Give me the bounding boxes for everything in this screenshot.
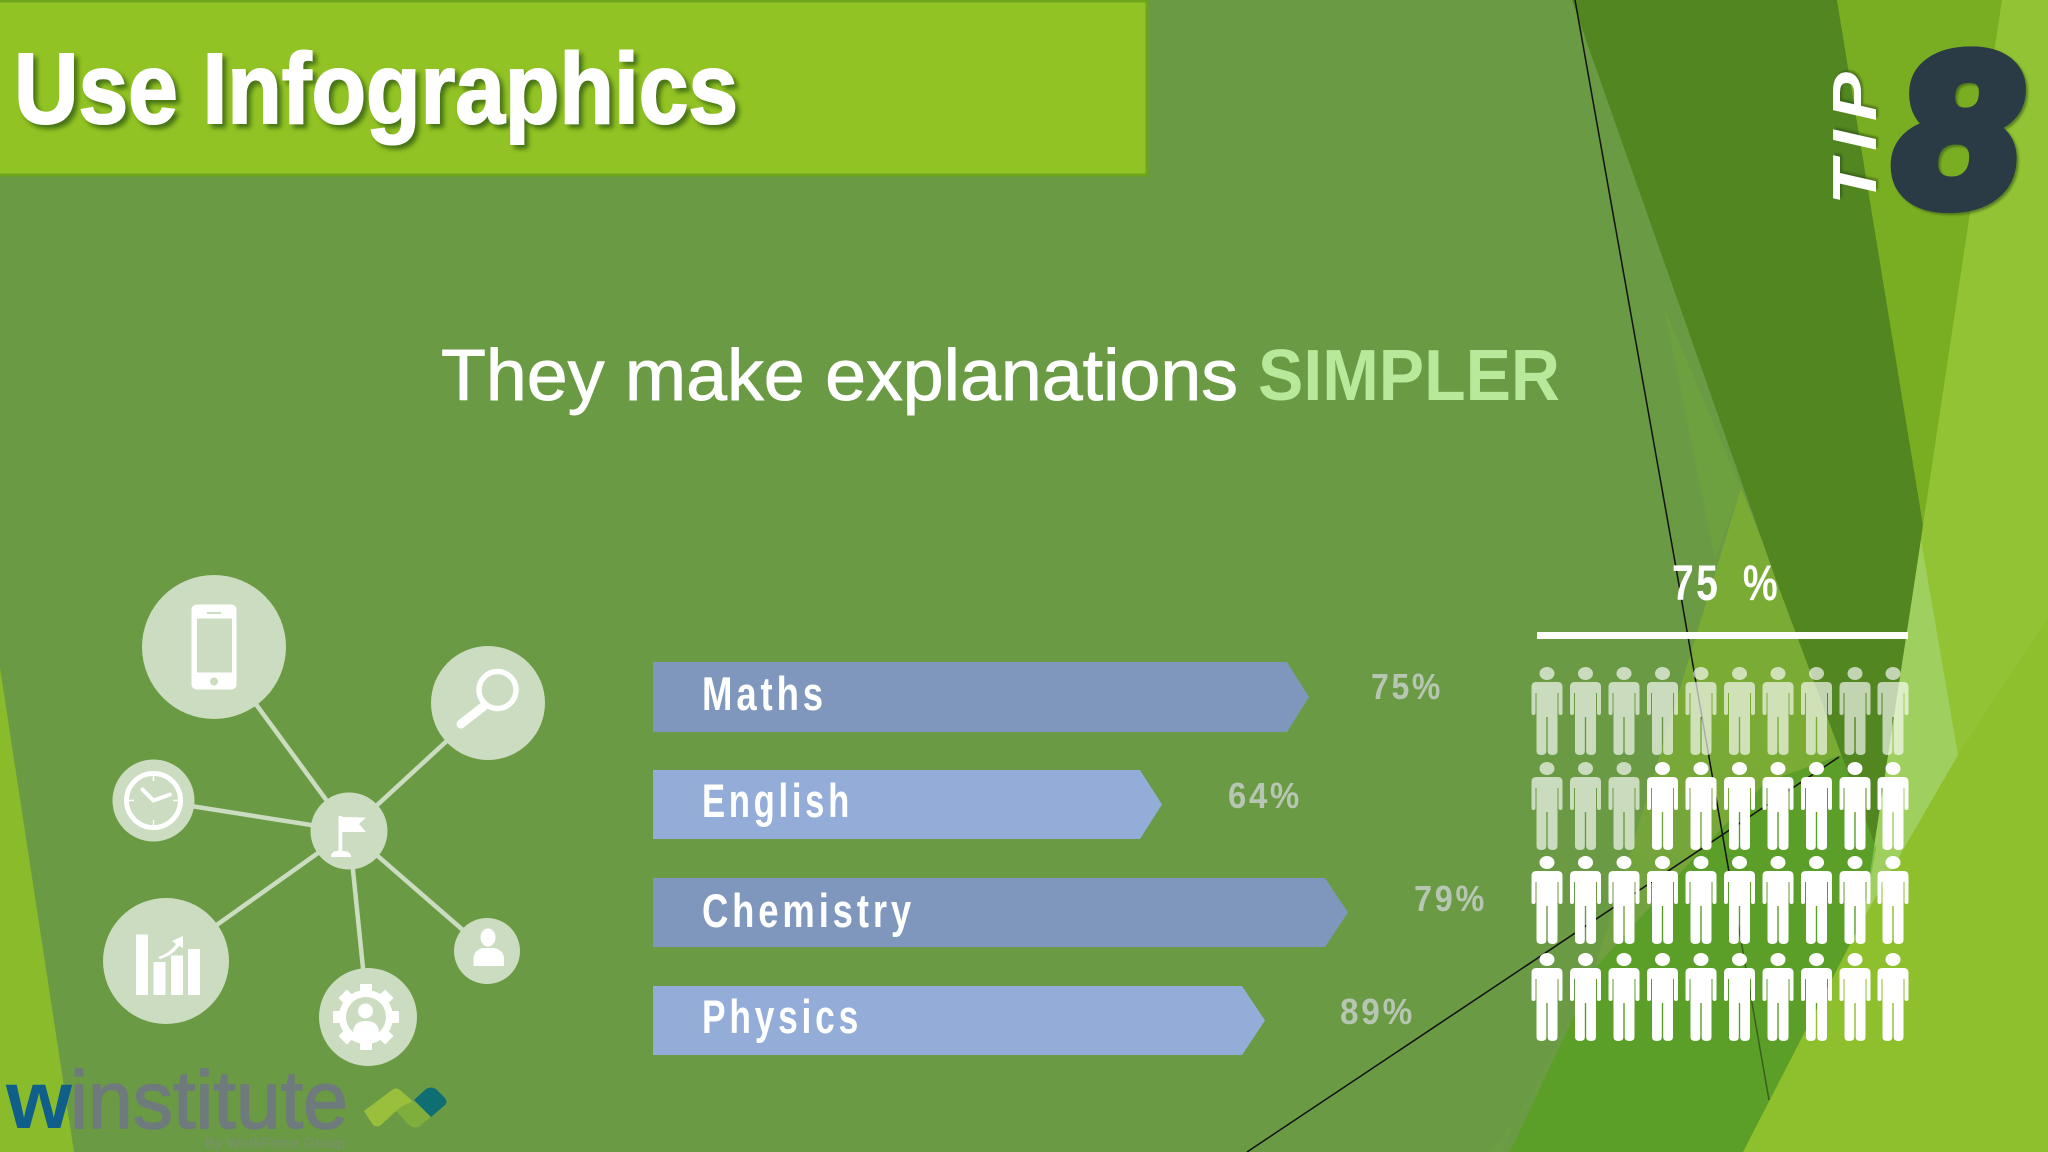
value: Chemistry: 79% [1414,878,1487,919]
people row 2 faded part [1532,762,1640,850]
title banner [0,1,1147,175]
bar: English: English [702,774,853,827]
value: Physics: 89% [1340,991,1415,1032]
number 8: 8 [1896,10,2018,248]
bar: English [653,770,1162,839]
subtitle: lead text: They make explanations [441,336,1238,416]
icon: bar chart [103,898,229,1024]
tip 8 badge [1821,10,2018,248]
bar: Chemistry [653,878,1348,947]
label: TIP: TIP [1821,63,1890,205]
logo wordmark: institute: institute [70,1055,348,1146]
people row 1 faded [1532,667,1908,755]
people row 2 solid part [1647,762,1908,850]
icon: gear person [319,968,417,1066]
people row 4 [1532,953,1908,1041]
subtitle [441,336,1560,416]
bar: Chemistry: Chemistry [702,884,915,937]
logo tagline: By WorkForce Group [205,1135,345,1152]
bar: Maths: Maths [702,667,827,720]
icon: magnifier [431,646,545,760]
bar: Physics [653,986,1265,1055]
pictogram heading: 75 % [1672,555,1780,611]
title text: Use Infographics [14,33,738,145]
network diagram [103,575,545,1066]
connector lines [153,647,488,1017]
value: English: 64% [1228,775,1302,816]
subject bar chart [653,662,1487,1055]
people row 3 [1532,856,1908,944]
icon: clock [112,760,194,842]
pictogram rule [1537,632,1908,639]
logo mark [364,1088,446,1128]
background: thin black lines [1247,0,1839,1152]
winstitute logo [5,1055,447,1152]
pictogram chart: 75 percent [1532,555,1908,1041]
logo wordmark: w: w [5,1055,72,1146]
bar: Physics: Physics [702,990,862,1043]
value: Maths: 75% [1371,666,1443,707]
bar: Maths [653,662,1309,732]
icon: flag hub [310,792,388,870]
icon: phone [142,575,286,719]
icon: person [454,918,520,984]
subtitle: emphasis: SIMPLER [1258,336,1560,416]
